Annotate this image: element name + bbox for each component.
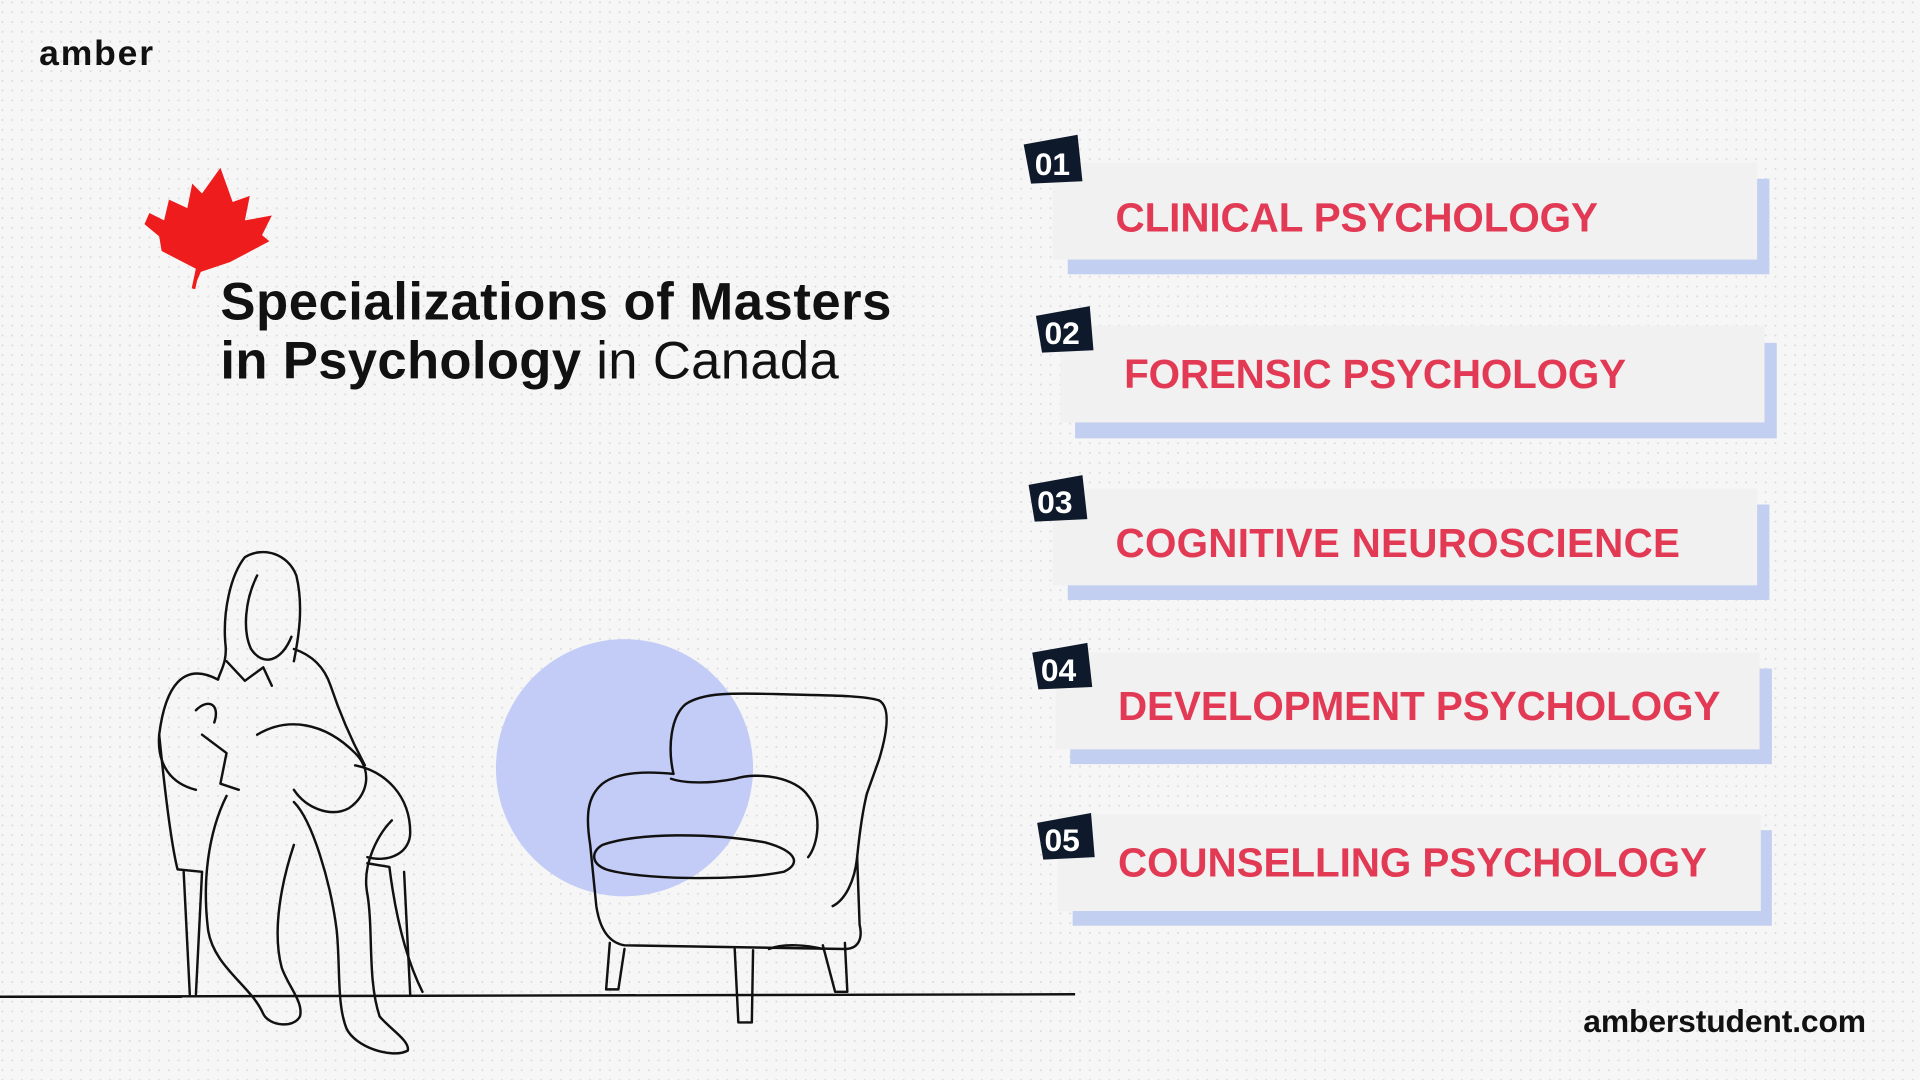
badge 03: 03 xyxy=(1037,484,1073,520)
ground line xyxy=(0,994,1075,997)
list item 03 xyxy=(1029,475,1769,600)
list item 05 xyxy=(1037,813,1772,926)
badge 04: 04 xyxy=(1041,652,1077,688)
list item 01: CLINICAL PSYCHOLOGY xyxy=(1116,194,1598,240)
list item 04 xyxy=(1032,643,1772,764)
title xyxy=(220,273,891,390)
list item 02 xyxy=(1036,306,1777,438)
title: in Psychology in Canada xyxy=(220,331,839,390)
badge 01: 01 xyxy=(1035,146,1070,182)
title: Specializations of Masters xyxy=(220,273,891,332)
list item 03: COGNITIVE NEUROSCIENCE xyxy=(1116,520,1680,566)
badge 02: 02 xyxy=(1044,315,1080,351)
badge 01 xyxy=(1024,135,1082,184)
illustration: woman on chair xyxy=(0,552,422,1053)
list item 01 xyxy=(1024,135,1769,274)
list item 05: COUNSELLING PSYCHOLOGY xyxy=(1118,840,1707,886)
badge 05 xyxy=(1037,813,1095,860)
illustration: armchair xyxy=(588,694,887,1022)
list item 02: FORENSIC PSYCHOLOGY xyxy=(1124,351,1626,397)
list item 04: DEVELOPMENT PSYCHOLOGY xyxy=(1118,683,1720,729)
badge 03 xyxy=(1029,475,1087,522)
icon: maple leaf xyxy=(144,168,272,289)
footer url: amberstudent.com xyxy=(1583,1003,1866,1039)
badge 05: 05 xyxy=(1044,822,1080,858)
circle decoration xyxy=(496,639,753,896)
badge 04 xyxy=(1032,643,1092,689)
logo: amber: amber xyxy=(39,33,153,73)
badge 02 xyxy=(1036,306,1093,353)
